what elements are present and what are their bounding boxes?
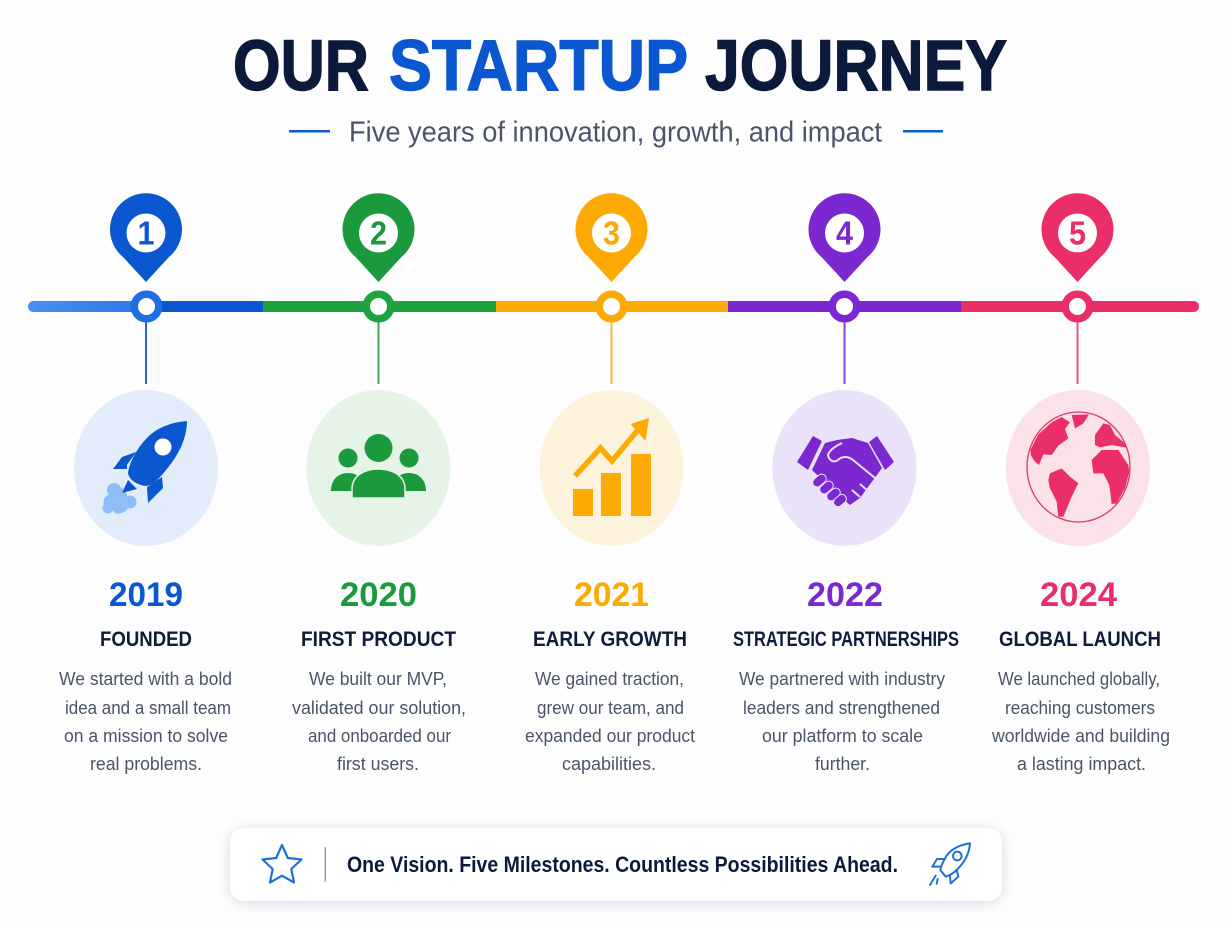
title: OUR xyxy=(233,27,369,106)
milestone 2 marker xyxy=(342,193,414,384)
milestone 3 text: EARLY GROWTH xyxy=(533,627,687,651)
milestone 5 text: reaching customers xyxy=(1005,697,1155,718)
milestone 1 text: FOUNDED xyxy=(100,627,192,651)
milestone 2 text: 2020 xyxy=(340,576,417,614)
milestone 1 text: on a mission to solve xyxy=(64,725,228,746)
milestone 4 text: We partnered with industry xyxy=(739,668,946,689)
icon: rocket xyxy=(74,390,218,546)
icon: rocket outline xyxy=(930,843,970,885)
icon: globe xyxy=(1006,390,1150,546)
milestone 5 marker: 5 xyxy=(1069,214,1086,252)
milestone 3 text: We gained traction, xyxy=(535,668,684,689)
callout: closing statement xyxy=(230,828,1002,901)
title xyxy=(233,27,1007,106)
milestone 2 text xyxy=(292,576,466,774)
milestone 4 text: our platform to scale xyxy=(762,725,923,746)
milestone 4 text: 2022 xyxy=(807,576,883,614)
milestone 5 text: GLOBAL LAUNCH xyxy=(999,627,1161,651)
title: STARTUP xyxy=(389,27,688,106)
milestone 5 text: a lasting impact. xyxy=(1017,753,1146,774)
milestone 1 text: idea and a small team xyxy=(65,697,231,718)
milestone 4 marker: 4 xyxy=(836,214,854,252)
milestone 4 text xyxy=(733,576,959,774)
milestone 5 text xyxy=(991,576,1170,774)
milestone 3 text: capabilities. xyxy=(562,753,656,774)
icon: growth chart xyxy=(540,390,684,546)
icon: handshake xyxy=(772,390,916,546)
callout: closing statement: One Vision. Five Milestones. Countless Possibilities Ahead. xyxy=(347,852,898,877)
title: JOURNEY xyxy=(705,27,1007,106)
milestone 3 text: expanded our product xyxy=(525,725,695,746)
milestone 1 text: real problems. xyxy=(90,753,202,774)
milestone 5 text: 2024 xyxy=(1040,576,1117,614)
milestone 2 text: FIRST PRODUCT xyxy=(301,627,456,651)
milestone 3 text: 2021 xyxy=(574,576,649,614)
milestone 2 text: validated our solution, xyxy=(292,697,466,718)
milestone 2 text: We built our MVP, xyxy=(309,668,447,689)
milestone 5 text: We launched globally, xyxy=(998,668,1160,689)
icon: star xyxy=(262,845,302,882)
icon: team xyxy=(306,390,450,546)
milestone 2 text: and onboarded our xyxy=(308,725,451,746)
milestone 1 marker: 1 xyxy=(138,214,154,252)
milestone 2 text: first users. xyxy=(337,753,419,774)
milestone 5 marker xyxy=(1041,193,1114,384)
milestone 4 text: leaders and strengthened xyxy=(743,697,940,718)
milestone 2 marker: 2 xyxy=(370,214,387,252)
milestone 3 text: grew our team, and xyxy=(537,697,684,718)
milestone 1 text: We started with a bold xyxy=(59,668,232,689)
timeline bar xyxy=(28,301,1199,312)
milestone 4 marker xyxy=(809,193,880,384)
milestone 4 text: further. xyxy=(815,753,870,774)
milestone 1 text: 2019 xyxy=(109,576,183,614)
milestone 3 marker xyxy=(576,193,648,384)
milestone 5 text: worldwide and building xyxy=(991,725,1170,746)
subtitle: Five years of innovation, growth, and impact xyxy=(349,116,882,148)
milestone 3 marker: 3 xyxy=(603,214,620,252)
milestone 1 text xyxy=(59,576,232,774)
milestone 4 text: STRATEGIC PARTNERSHIPS xyxy=(733,627,959,651)
milestone 1 marker xyxy=(110,193,182,384)
milestone 3 text xyxy=(525,576,695,774)
